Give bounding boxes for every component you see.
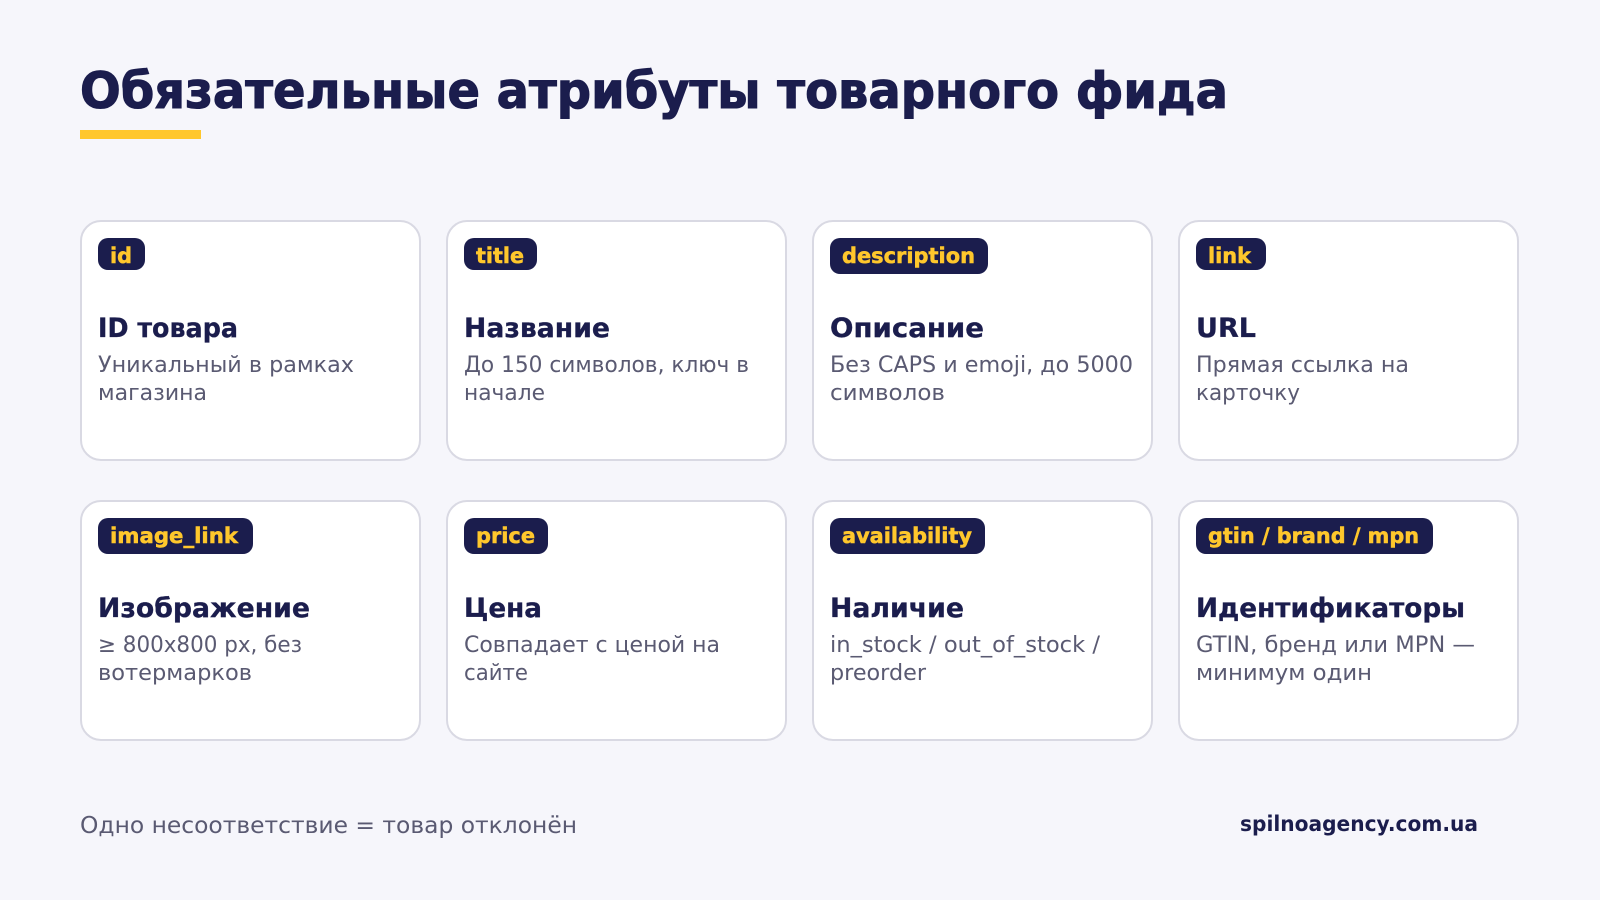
description: image_link: вотермарков bbox=[98, 661, 252, 686]
description: title: начале bbox=[464, 381, 545, 406]
description: description bbox=[830, 353, 1133, 406]
heading: Идентификаторы: Идентификаторы bbox=[1196, 593, 1465, 624]
tag: link: link bbox=[1208, 244, 1252, 268]
panel: title bbox=[447, 221, 786, 460]
tag: image_link: image_link bbox=[110, 524, 239, 548]
description: availability bbox=[830, 633, 1101, 686]
description: gtin / brand / mpn bbox=[1196, 633, 1475, 686]
description: title: До 150 символов, ключ в bbox=[464, 353, 749, 378]
panel: availability bbox=[813, 501, 1152, 740]
title: Обязательные атрибуты товарного фида bbox=[80, 62, 1228, 120]
heading: Цена: Цена bbox=[464, 593, 542, 624]
heading: Описание: Описание bbox=[830, 313, 984, 344]
tag: image_link bbox=[98, 518, 253, 554]
panel: price bbox=[447, 501, 786, 740]
description: title bbox=[464, 353, 749, 406]
description: price: сайте bbox=[464, 661, 528, 686]
heading: URL: URL bbox=[1196, 313, 1256, 344]
tag: price: price bbox=[476, 524, 535, 548]
tag: gtin / brand / mpn bbox=[1196, 518, 1433, 554]
tag: title: title bbox=[476, 244, 524, 268]
description: description: Без CAPS и emoji, до 5000 bbox=[830, 353, 1133, 378]
panel: image_link bbox=[81, 501, 420, 740]
description: link: карточку bbox=[1196, 381, 1300, 406]
description: id bbox=[98, 353, 354, 406]
title underline accent bbox=[80, 130, 201, 139]
description: price bbox=[464, 633, 720, 686]
panel: gtin / brand / mpn bbox=[1179, 501, 1518, 740]
footer brand: spilnoagency.com.ua bbox=[1240, 812, 1478, 836]
description: availability: in_stock / out_of_stock / bbox=[830, 633, 1101, 658]
tag: gtin / brand / mpn: gtin / brand / mpn bbox=[1208, 524, 1419, 548]
tag: id bbox=[98, 238, 145, 270]
description: image_link: ≥ 800x800 px, без bbox=[98, 633, 302, 658]
heading: Наличие: Наличие bbox=[830, 593, 964, 624]
heading: ID товара: ID товара bbox=[98, 313, 238, 344]
tag: price bbox=[464, 518, 548, 554]
panel: link bbox=[1179, 221, 1518, 460]
panel: description bbox=[813, 221, 1152, 460]
tag: description: description bbox=[842, 244, 975, 268]
description: price: Совпадает с ценой на bbox=[464, 633, 720, 658]
tag: id: id bbox=[110, 244, 132, 268]
footer note: Одно несоответствие = товар отклонён bbox=[80, 813, 577, 839]
heading: Название: Название bbox=[464, 313, 610, 344]
description: link bbox=[1196, 353, 1409, 406]
description: availability: preorder bbox=[830, 661, 927, 686]
tag: description bbox=[830, 238, 988, 274]
tag: availability bbox=[830, 518, 985, 554]
description: link: Прямая ссылка на bbox=[1196, 353, 1409, 378]
description: id: Уникальный в рамках bbox=[98, 353, 354, 378]
tag: link bbox=[1196, 238, 1266, 270]
description: gtin / brand / mpn: минимум один bbox=[1196, 661, 1372, 686]
panel: id bbox=[81, 221, 420, 460]
description: id: магазина bbox=[98, 381, 207, 406]
description: image_link bbox=[98, 633, 302, 686]
tag: availability: availability bbox=[842, 524, 972, 548]
heading: Изображение: Изображение bbox=[98, 593, 310, 624]
description: gtin / brand / mpn: GTIN, бренд или MPN — bbox=[1196, 633, 1475, 658]
description: description: символов bbox=[830, 381, 945, 406]
tag: title bbox=[464, 238, 537, 270]
